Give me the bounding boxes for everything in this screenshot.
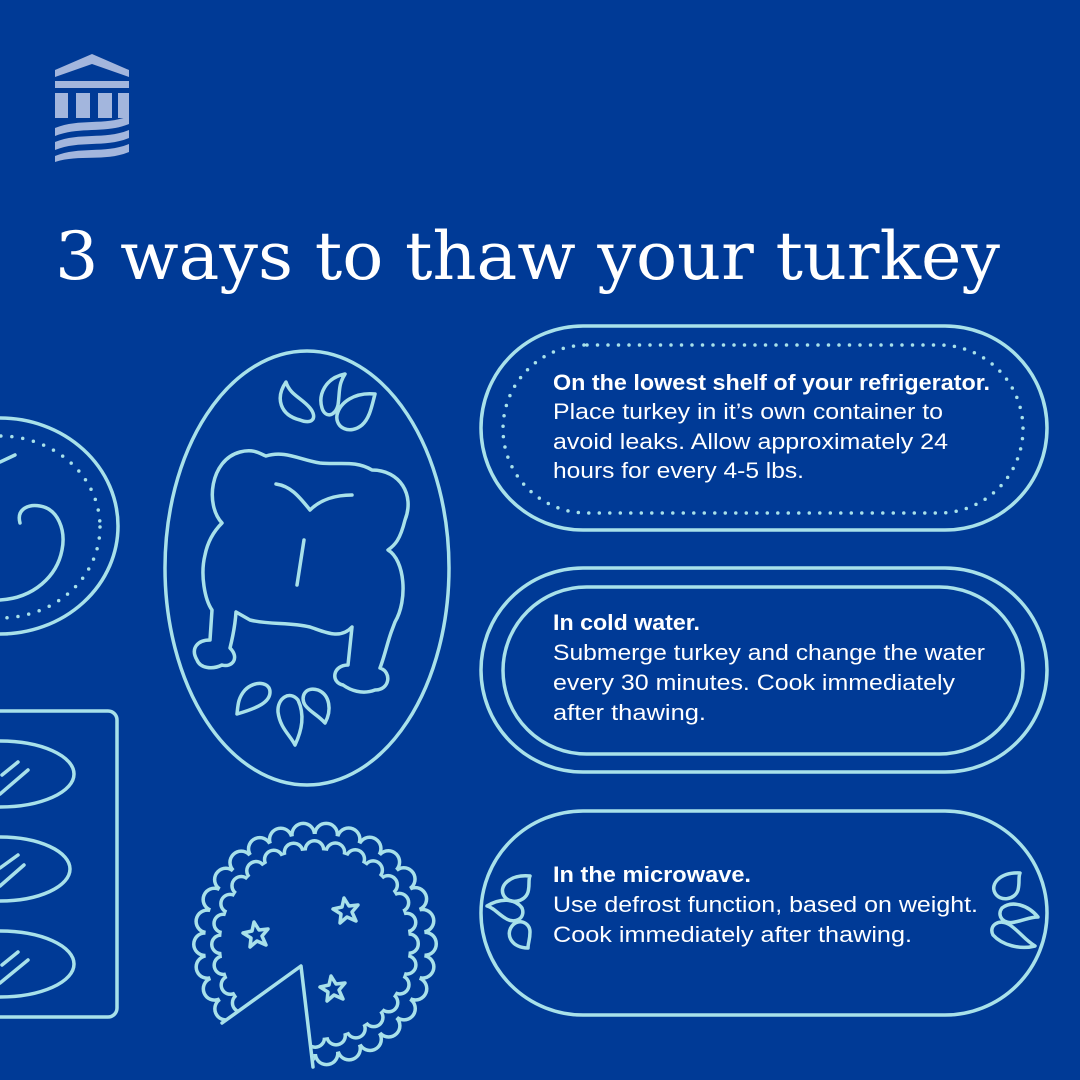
panel: microwave	[481, 811, 1047, 1015]
panel: cold water: Submerge turkey and change the water	[553, 640, 985, 665]
panel: refrigerator: Place turkey in it’s own container to	[553, 399, 943, 424]
illustration: left plate	[0, 418, 118, 634]
panel: refrigerator: On the lowest shelf of your refrigerator.	[553, 370, 990, 395]
panel: cold water: In cold water.	[553, 610, 700, 635]
panel: cold water: every 30 minutes. Cook immediately	[553, 670, 955, 695]
panel: microwave: Use defrost function, based on weight.	[553, 892, 978, 917]
panel: cold water: after thawing.	[553, 700, 706, 725]
title: 3 ways to thaw your turkey	[55, 218, 1001, 295]
illustration: turkey platter	[165, 351, 449, 785]
illustration: baguette tray	[0, 711, 117, 1017]
panel: refrigerator	[481, 326, 1047, 530]
panel: microwave: In the microwave.	[553, 862, 751, 887]
panel: cold water	[481, 568, 1047, 772]
logo	[55, 54, 129, 162]
illustration: pie	[205, 834, 425, 1080]
panel: microwave: Cook immediately after thawing.	[553, 922, 912, 947]
panel: refrigerator: hours for every 4-5 lbs.	[553, 458, 804, 483]
panel: refrigerator: avoid leaks. Allow approximately 24	[553, 429, 948, 454]
leaves bottom	[237, 683, 270, 714]
leaves top	[280, 382, 314, 422]
